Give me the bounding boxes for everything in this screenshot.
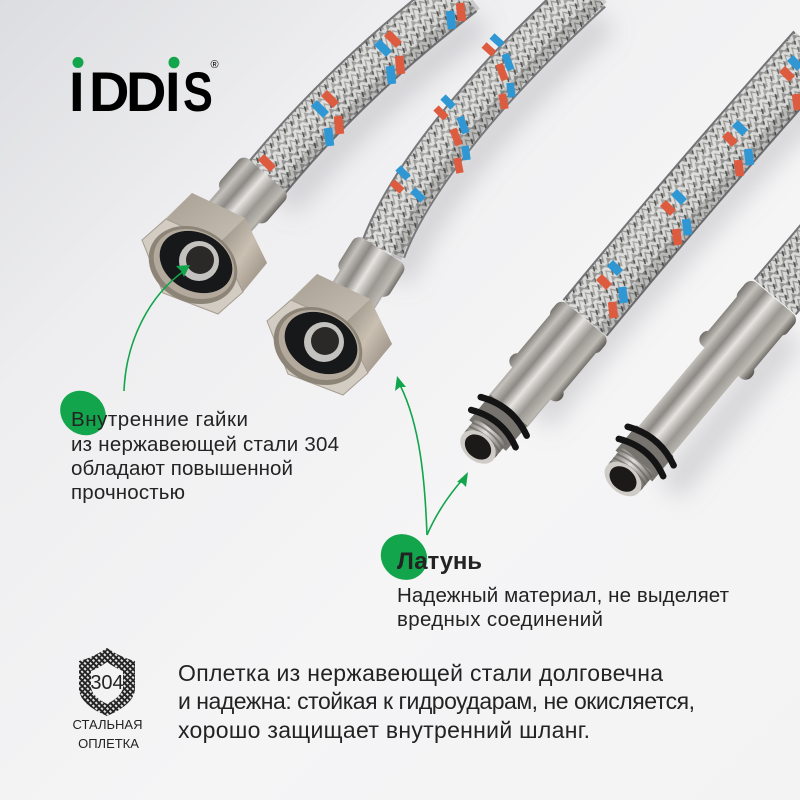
hose 2 blue strands	[398, 36, 512, 200]
hose 4 braided	[775, 232, 800, 297]
hose 2 red strands	[392, 45, 505, 191]
nut left	[135, 193, 267, 319]
logo: ®	[210, 59, 219, 71]
text: nuts: Внутренние гайки	[71, 408, 248, 431]
hose 1 red strands	[261, 3, 462, 169]
text: nuts: прочностью	[71, 481, 185, 504]
text: brass	[397, 548, 730, 631]
nut right	[260, 274, 392, 400]
hose 1 blue strands	[314, 11, 452, 146]
text: brass: Латунь	[397, 548, 482, 575]
green blob: brass	[371, 525, 437, 589]
logo: IDDI	[69, 60, 181, 123]
hose 3 red strands	[599, 69, 798, 318]
badge: steel braid 304	[73, 648, 142, 751]
text: nuts: из нержавеющей стали 304	[71, 433, 339, 456]
badge: steel braid 304: СТАЛЬНАЯ	[73, 717, 142, 732]
hose shadows	[285, 20, 800, 490]
text: brass: Надежный материал, не выделяет	[397, 584, 730, 607]
arrow: to fitting	[427, 472, 468, 535]
text: brass: вредных соединений	[397, 608, 603, 631]
badge: steel braid 304: 304	[90, 672, 124, 694]
text: nuts	[71, 408, 339, 504]
fitting with short hex	[444, 298, 611, 479]
hose 2 braided	[377, 0, 603, 258]
text: braid description	[178, 660, 695, 743]
fitting: neck of right nut	[322, 234, 407, 322]
text: braid description: и надежна: стойкая к гидроударам, не окисляется,	[178, 688, 695, 714]
arrow: to right nut	[395, 376, 427, 535]
green blob: nuts	[51, 381, 115, 445]
text: braid description: хорошо защищает внутренний шланг.	[178, 717, 590, 743]
fitting: neck of left nut	[199, 154, 290, 246]
text: braid description: Оплетка из нержавеющей стали долговечна	[178, 660, 663, 686]
hose 3 blue strands	[610, 58, 800, 303]
badge: steel braid 304: ОПЛЕТКА	[78, 736, 139, 751]
hose 3 braided	[578, 44, 800, 332]
arrow: to nut	[124, 265, 190, 391]
logo: S	[183, 60, 213, 123]
fitting with long tube	[589, 277, 800, 511]
text: nuts: обладают повышенной	[71, 457, 293, 480]
hose 1 braided	[259, 0, 476, 192]
